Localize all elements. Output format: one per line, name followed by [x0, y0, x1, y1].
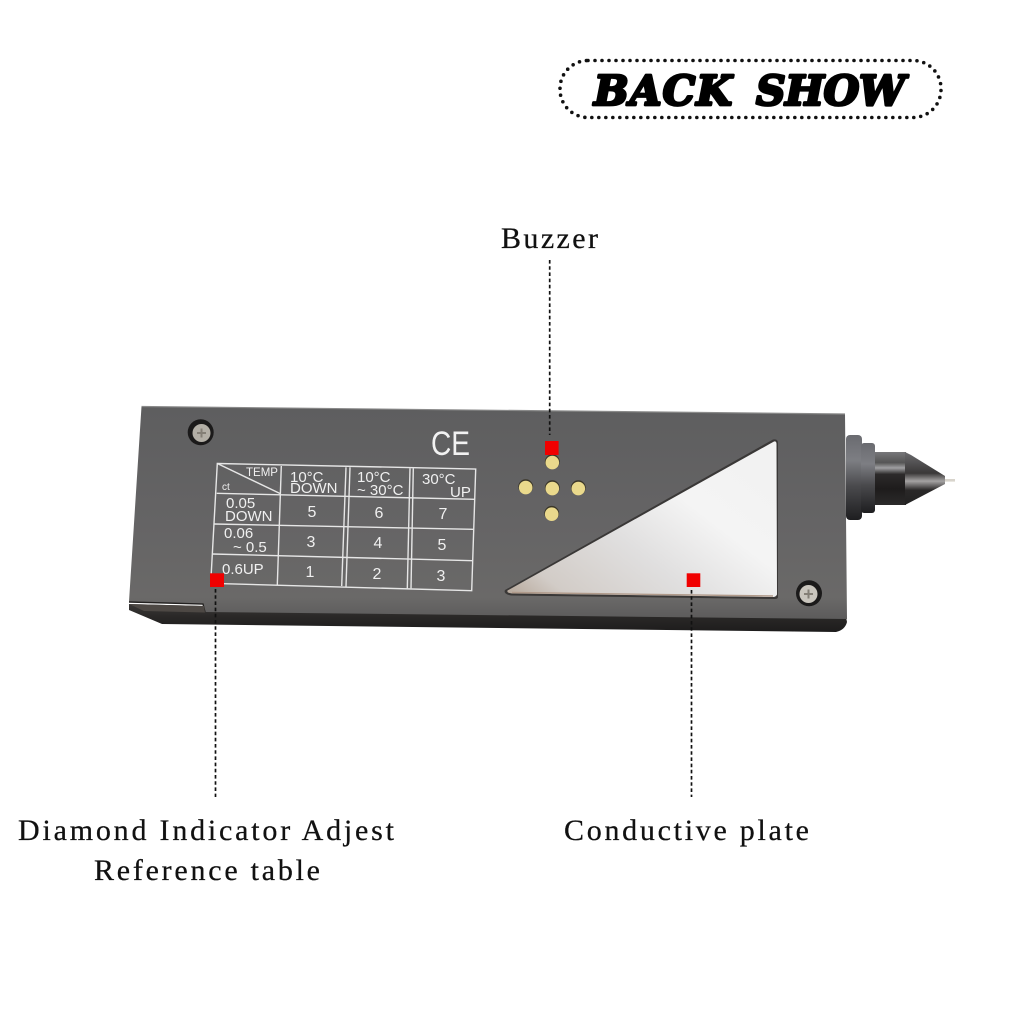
marker: buzzer — [545, 441, 559, 455]
leader line: buzzer — [549, 260, 551, 435]
label: Diamond Indicator Adjest Reference table: Reference table — [94, 854, 320, 887]
heading badge: BACK SHOW — [560, 60, 941, 118]
reference table on panel: 30°C — [422, 471, 456, 488]
leader line: conductive plate — [690, 590, 692, 797]
reference table on panel: 0.06 — [224, 525, 253, 542]
reference table on panel: 2 — [373, 566, 382, 583]
reference table on panel — [211, 464, 476, 591]
label: Conductive plate: Conductive plate — [564, 814, 809, 847]
heading badge: BACK SHOW: SHOW — [756, 67, 909, 115]
reference table on panel: 3 — [437, 568, 446, 585]
heading badge: BACK SHOW: BACK — [593, 67, 733, 115]
reference table on panel: UP — [450, 484, 471, 501]
reference table on panel: 6 — [375, 505, 384, 522]
reference table on panel: 3 — [307, 534, 316, 551]
marker: conductive plate — [687, 573, 700, 587]
reference table on panel: 4 — [374, 535, 383, 552]
reference table on panel: 5 — [438, 537, 447, 554]
reference table on panel: 10°C — [290, 469, 324, 486]
reference table on panel: 10°C — [357, 469, 391, 486]
probe tip — [846, 435, 955, 520]
label: Buzzer: Buzzer — [501, 222, 598, 255]
reference table on panel: 1 — [306, 564, 315, 581]
reference table on panel: 7 — [439, 506, 448, 523]
reference table on panel: 5 — [308, 504, 317, 521]
reference table on panel: ~ 0.5 — [233, 539, 267, 556]
screw: bottom right — [796, 580, 822, 606]
reference table on panel: DOWN — [225, 508, 272, 525]
label: Diamond Indicator Adjest Reference table: Diamond Indicator Adjest — [18, 814, 395, 847]
reference table on panel: ct — [222, 482, 230, 493]
label: Diamond Indicator Adjest Reference table — [18, 814, 395, 887]
reference table on panel: 0.6UP — [222, 561, 264, 578]
reference table on panel: 0.05 — [226, 495, 255, 512]
conductive metal plate — [505, 439, 778, 599]
reference table on panel: ~ 30°C — [357, 482, 404, 499]
diamond tester device, back view — [129, 406, 955, 632]
device back panel — [129, 406, 847, 619]
leader line: reference table — [214, 589, 216, 797]
screw: top left — [188, 419, 214, 445]
buzzer holes — [518, 454, 586, 521]
device underside edge — [129, 604, 847, 632]
marker: reference table — [210, 573, 224, 587]
reference table on panel: DOWN — [290, 480, 338, 497]
reference table on panel: TEMP — [246, 467, 278, 479]
CE mark: CE — [431, 425, 470, 463]
